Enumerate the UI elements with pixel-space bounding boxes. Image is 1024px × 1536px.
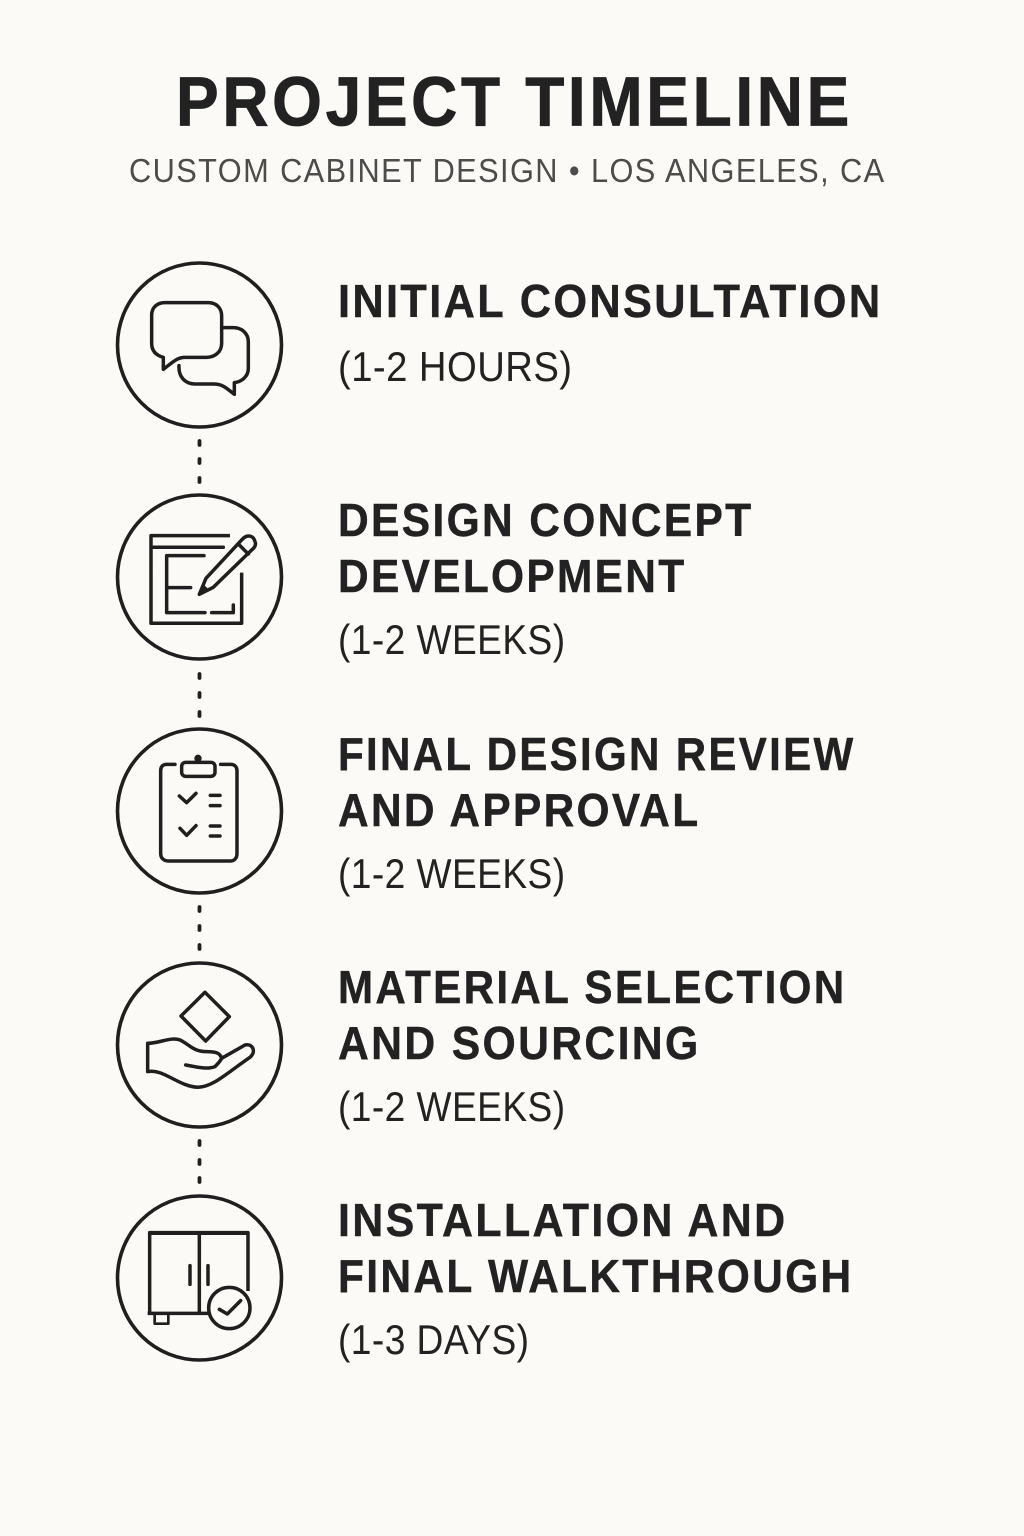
step 3 text: (1-2 WEEKS) [338, 850, 566, 897]
connector 3 [198, 907, 201, 949]
step 2 text: DESIGN CONCEPT [338, 494, 754, 546]
step 5 text [338, 1194, 854, 1363]
subtitle: CUSTOM CABINET DESIGN • LOS ANGELES, CA [129, 152, 886, 189]
title: PROJECT TIMELINE [176, 62, 853, 140]
step 4 text: AND SOURCING [338, 1017, 700, 1069]
step 1: initial consultation [118, 263, 882, 427]
step 1 text: (1-2 HOURS) [338, 343, 572, 390]
step 3 text: AND APPROVAL [338, 784, 700, 836]
step 5 text: INSTALLATION AND [338, 1194, 788, 1246]
step 2 text: DEVELOPMENT [338, 550, 686, 602]
step 5 text: FINAL WALKTHROUGH [338, 1250, 854, 1302]
connector 1 [198, 441, 201, 482]
step 1 text [338, 275, 882, 390]
step 3: final design review [118, 728, 856, 897]
step 2: design concept development [118, 494, 754, 663]
icon: clipboard checklist [118, 729, 282, 893]
step 2 text [338, 494, 754, 663]
step 4: material selection [118, 961, 846, 1130]
step 4 text: (1-2 WEEKS) [338, 1083, 566, 1130]
icon: design sketch with pencil [118, 495, 282, 659]
step 5: installation [118, 1194, 854, 1363]
step 2 text: (1-2 WEEKS) [338, 616, 566, 663]
connector 2 [198, 674, 201, 716]
connector 4 [198, 1141, 201, 1182]
step 1 text: INITIAL CONSULTATION [338, 275, 882, 327]
step 4 text: MATERIAL SELECTION [338, 961, 846, 1013]
step 3 text [338, 728, 856, 897]
icon: chat bubbles [118, 263, 282, 427]
step 3 text: FINAL DESIGN REVIEW [338, 728, 856, 780]
step 5 text: (1-3 DAYS) [338, 1316, 530, 1363]
icon: cabinet with check mark [118, 1196, 282, 1360]
icon: hand holding material sample [118, 963, 282, 1127]
step 4 text [338, 961, 846, 1130]
